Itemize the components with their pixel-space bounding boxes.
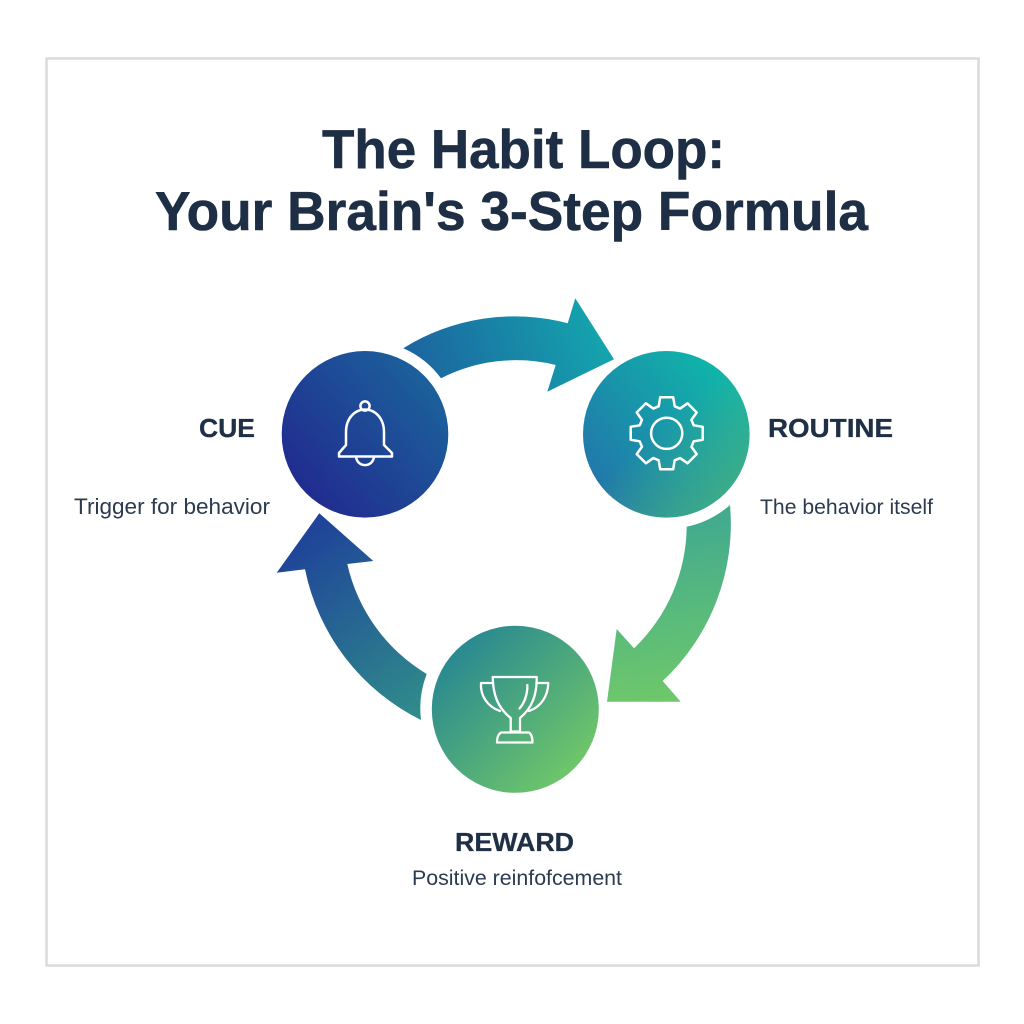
label: cue: CUE: [199, 413, 255, 443]
description: routine: The behavior itself: [760, 496, 933, 519]
cue circle with bell icon: [282, 351, 448, 518]
label: reward: REWARD: [455, 827, 574, 857]
icon: gear: [631, 397, 703, 469]
icon: trophy: [481, 677, 548, 742]
title: The Habit Loop:: [322, 118, 725, 180]
description: cue: Trigger for behavior: [74, 494, 270, 519]
routine circle with gear icon: [583, 351, 750, 518]
label: cue: [74, 413, 270, 519]
label: routine: ROUTINE: [768, 413, 893, 443]
description: reward: Positive reinfofcement: [412, 867, 622, 890]
arrow: routine to reward: [607, 505, 731, 702]
title: [155, 118, 868, 242]
title: Your Brain's 3-Step Formula: [155, 180, 868, 242]
label: routine: [760, 413, 933, 519]
reward circle with trophy icon: [432, 626, 599, 793]
icon: bell: [339, 401, 392, 465]
arrow: cue to routine: [403, 298, 614, 392]
label: reward: [412, 827, 622, 890]
arrow: reward to cue: [277, 513, 427, 720]
